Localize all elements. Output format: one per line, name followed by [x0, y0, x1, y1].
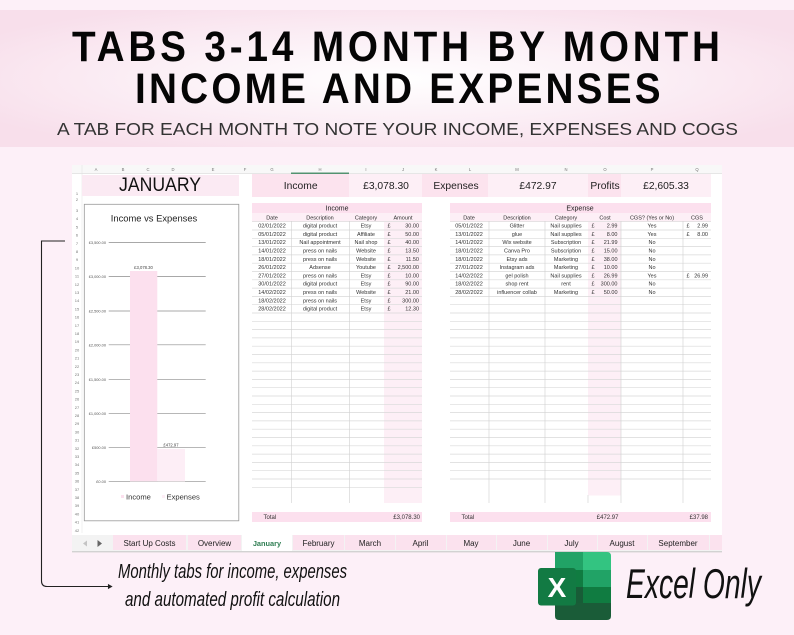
- expense costs: 300.00: [601, 282, 618, 288]
- expense column headers: Date: [463, 215, 475, 221]
- income heading: Income: [326, 206, 349, 213]
- income column headers: Category: [355, 215, 377, 221]
- income amounts: £: [387, 248, 391, 254]
- expense costs: 21.99: [604, 240, 618, 246]
- income total: Total: [264, 515, 276, 521]
- expense costs: £: [591, 265, 595, 271]
- row numbers: 32: [75, 446, 80, 451]
- expense total: [450, 512, 711, 522]
- sheet tabs: Start Up Costs: [123, 539, 176, 548]
- icon: excel logo: X: [548, 572, 567, 603]
- income descriptions: Adsense: [309, 265, 331, 271]
- row numbers: 12: [75, 282, 80, 287]
- expense CGS flags: No: [648, 265, 656, 271]
- sheet tabs: January: [253, 539, 282, 548]
- expense descriptions: gel polish: [505, 273, 529, 279]
- income column headers: Date: [266, 215, 278, 221]
- row numbers: 16: [75, 315, 80, 320]
- month heading: January: JANUARY: [119, 175, 201, 196]
- active tab: January: [242, 535, 292, 551]
- sheet tabs: September: [658, 539, 698, 548]
- expense CGS flags: No: [648, 282, 656, 288]
- expense CGS flags: Yes: [648, 232, 657, 238]
- expense categories: Nail supplies: [550, 224, 582, 230]
- row numbers: 6: [76, 233, 79, 238]
- expense costs: £: [591, 240, 595, 246]
- expense categories: Marketing: [554, 265, 578, 271]
- summary bar: Expenses: [433, 181, 479, 192]
- income descriptions: [299, 224, 341, 313]
- expense categories: rent: [561, 282, 571, 288]
- expense CGS flags: No: [648, 290, 656, 296]
- expense column headers: CGS? (Yes or No): [630, 215, 674, 221]
- row numbers: 41: [75, 520, 80, 525]
- expense categories: Marketing: [554, 290, 578, 296]
- axis labels: £3,500.00: [89, 240, 107, 245]
- expense dates: 14/02/2022: [455, 273, 483, 279]
- sheet tabs: April: [412, 539, 429, 548]
- income amounts: 300.00: [402, 298, 419, 304]
- expense CGS values: £: [686, 273, 690, 279]
- income dates: 14/02/2022: [258, 290, 286, 296]
- expense descriptions: glue: [512, 232, 522, 238]
- income column headers: Amount: [394, 215, 413, 221]
- expense descriptions: Canva Pro: [504, 248, 530, 254]
- spreadsheet panel: [72, 165, 722, 552]
- expense CGS values: £: [686, 224, 690, 230]
- row numbers: 33: [75, 454, 80, 459]
- axis labels: £1,500.00: [89, 377, 107, 382]
- income amounts: £: [387, 298, 391, 304]
- column letters: Q: [695, 167, 699, 172]
- row numbers: 21: [75, 356, 80, 361]
- income descriptions: press on nails: [303, 273, 337, 279]
- income column headers: Description: [306, 215, 334, 221]
- income categories: Website: [356, 290, 376, 296]
- summary bar: £472.97: [519, 181, 557, 192]
- expense categories: Subscription: [551, 240, 581, 246]
- bracket arrow: [42, 241, 112, 588]
- summary bar: £3,078.30: [363, 181, 409, 192]
- income amounts: 21.00: [405, 290, 419, 296]
- expense dates: 27/01/2022: [455, 265, 483, 271]
- expense costs: 10.00: [604, 265, 618, 271]
- row numbers: [75, 191, 80, 533]
- axis labels: [89, 240, 107, 484]
- row numbers: 7: [76, 241, 79, 246]
- income dates: 18/02/2022: [258, 298, 286, 304]
- expense CGS values: 8.00: [697, 232, 708, 238]
- column letters: B: [122, 167, 125, 172]
- income amounts: £: [387, 282, 391, 288]
- column letters: K: [435, 167, 438, 172]
- expense CGS flags: Yes: [648, 273, 657, 279]
- row numbers: 22: [75, 364, 80, 369]
- income categories: Website: [356, 257, 376, 263]
- income descriptions: press on nails: [303, 248, 337, 254]
- income total: [252, 512, 422, 522]
- expense total: Total: [462, 515, 474, 521]
- expense costs: £: [591, 290, 595, 296]
- sheet tabs: August: [610, 539, 635, 548]
- row numbers: 2: [76, 197, 79, 202]
- column letters: G: [270, 167, 274, 172]
- callout: monthly tabs note: [118, 561, 347, 611]
- column letters: M: [515, 167, 519, 172]
- axis labels: £0.00: [96, 479, 107, 484]
- sheet tabs: July: [564, 539, 579, 548]
- expense costs: 2.99: [607, 224, 618, 230]
- income amounts: [387, 224, 419, 313]
- income total: £3,078.30: [393, 515, 421, 521]
- row numbers: 8: [76, 249, 79, 254]
- expense dates: 18/02/2022: [455, 282, 483, 288]
- expense column headers: Cost: [599, 215, 611, 221]
- tab navigation arrows: [83, 540, 102, 547]
- income amounts: 30.00: [405, 224, 419, 230]
- expense costs: 38.00: [604, 257, 618, 263]
- income dates: 18/01/2022: [258, 257, 286, 263]
- income amounts: 90.00: [405, 282, 419, 288]
- income descriptions: digital product: [303, 307, 338, 313]
- row numbers: 20: [75, 347, 80, 352]
- column letters: A: [95, 167, 98, 172]
- row numbers: 23: [75, 372, 80, 377]
- legend: [121, 492, 200, 502]
- income amounts: £: [387, 265, 391, 271]
- chart: income vs expenses: [84, 204, 239, 521]
- row numbers: 39: [75, 503, 80, 508]
- column letters: O: [603, 167, 607, 172]
- row numbers: 5: [76, 224, 79, 229]
- sheet tabs: Overview: [198, 539, 231, 548]
- row numbers: 25: [75, 388, 80, 393]
- expense CGS values: 2.99: [697, 224, 708, 230]
- expense descriptions: Instagram ads: [500, 265, 535, 271]
- income descriptions: press on nails: [303, 298, 337, 304]
- row numbers: 3: [76, 208, 79, 213]
- expense costs: £: [591, 257, 595, 263]
- sheet tabs: June: [513, 539, 531, 548]
- row numbers: 35: [75, 470, 80, 475]
- expense descriptions: Glitter: [510, 224, 525, 230]
- expense CGS flags: No: [648, 248, 656, 254]
- row numbers: 15: [75, 306, 80, 311]
- expense column headers: Category: [555, 215, 577, 221]
- income amounts: 40.00: [405, 240, 419, 246]
- expense table: [450, 203, 711, 522]
- expense CGS flags: [648, 224, 657, 296]
- expense categories: [550, 224, 582, 296]
- axis labels: £2,500.00: [89, 308, 107, 314]
- sheet tabs: May: [463, 539, 479, 548]
- expense costs: £: [591, 224, 595, 230]
- sheet tabs: March: [359, 539, 381, 548]
- callout: monthly tabs note: and automated profit calculation: [125, 589, 340, 611]
- expense descriptions: Etsy ads: [506, 257, 528, 263]
- column letters: N: [564, 167, 568, 172]
- income categories: Etsy: [361, 224, 372, 230]
- sheet tabs: [72, 535, 722, 552]
- income categories: Etsy: [361, 273, 372, 279]
- income amounts: 11.50: [406, 257, 419, 263]
- income descriptions: press on nails: [303, 257, 337, 263]
- row numbers: 36: [75, 479, 80, 484]
- summary bar: £2,605.33: [643, 181, 689, 192]
- income dates: 27/01/2022: [258, 273, 286, 279]
- income dates: 05/01/2022: [258, 232, 286, 238]
- expense total: £37.98: [690, 515, 709, 521]
- income amounts: £: [387, 307, 391, 313]
- bar: expenses: [157, 449, 185, 481]
- row numbers: 26: [75, 397, 80, 402]
- income descriptions: digital product: [303, 232, 338, 238]
- income dates: 30/01/2022: [258, 282, 286, 288]
- expense costs: 26.99: [604, 273, 618, 279]
- income descriptions: Nail appointment: [299, 240, 341, 246]
- summary bar: Profits: [590, 181, 620, 192]
- column letters: [95, 167, 699, 172]
- legend: Income: [126, 492, 151, 502]
- column letters: F: [244, 167, 247, 172]
- expense column headers: Description: [503, 215, 531, 221]
- income amounts: 10.00: [405, 273, 419, 279]
- expense costs: [591, 224, 618, 296]
- callout: monthly tabs note: Monthly tabs for income, expenses: [118, 561, 347, 583]
- axis labels: £3,000.00: [89, 274, 107, 279]
- row numbers: 9: [76, 257, 79, 262]
- expense heading: Expense: [566, 206, 594, 213]
- row numbers: 1: [76, 191, 79, 196]
- income dates: 13/01/2022: [258, 240, 286, 246]
- income categories: Affiliate: [357, 232, 375, 238]
- expense costs: 15.00: [604, 248, 618, 254]
- expense categories: Nail supplies: [550, 273, 582, 279]
- expense costs: £: [591, 282, 595, 288]
- row numbers: 31: [75, 438, 80, 443]
- row numbers: 24: [75, 380, 80, 385]
- income dates: [258, 224, 286, 313]
- row numbers: 18: [75, 331, 80, 336]
- expense categories: Subscription: [551, 248, 581, 254]
- income amounts: £: [387, 290, 391, 296]
- bar labels: [134, 265, 179, 448]
- expense costs: £: [591, 273, 595, 279]
- expense dates: 18/01/2022: [455, 248, 483, 254]
- income column headers: [266, 215, 413, 221]
- expense CGS values: £: [686, 232, 690, 238]
- income dates: 02/01/2022: [258, 224, 286, 230]
- expense categories: Marketing: [554, 257, 578, 263]
- expense dates: 14/01/2022: [455, 240, 483, 246]
- expense descriptions: shop rent: [506, 282, 529, 288]
- row numbers: 42: [75, 528, 80, 533]
- column letters: D: [171, 167, 175, 172]
- row numbers: 10: [75, 265, 80, 270]
- income dates: 28/02/2022: [258, 307, 286, 313]
- income descriptions: digital product: [303, 282, 338, 288]
- chart title: Income vs Expenses: [111, 212, 198, 224]
- expense dates: 18/01/2022: [455, 257, 483, 263]
- income amounts: £: [387, 240, 391, 246]
- income amounts: £: [387, 232, 391, 238]
- income categories: [355, 224, 377, 313]
- column letters: I: [365, 167, 367, 172]
- expense categories: Nail supplies: [550, 232, 582, 238]
- summary bar: [252, 174, 711, 197]
- income dates: 26/01/2022: [258, 265, 286, 271]
- expense CGS flags: No: [648, 257, 656, 263]
- expense CGS flags: Yes: [648, 224, 657, 230]
- title: [72, 22, 720, 112]
- income amounts: 50.00: [405, 232, 419, 238]
- expense costs: 8.00: [607, 232, 618, 238]
- income amounts: 13.50: [405, 248, 419, 254]
- axis labels: £2,000.00: [89, 342, 107, 347]
- income categories: Youtube: [356, 265, 376, 271]
- expense costs: 50.00: [604, 290, 618, 296]
- bar labels: £3,078.30: [134, 265, 153, 270]
- row numbers: 38: [75, 495, 80, 500]
- income descriptions: press on nails: [303, 290, 337, 296]
- income amounts: £: [387, 273, 391, 279]
- row numbers: 37: [75, 487, 80, 492]
- expense dates: 05/01/2022: [455, 224, 483, 230]
- axis labels: £1,000.00: [89, 411, 107, 416]
- income dates: 14/01/2022: [258, 248, 286, 254]
- row numbers: 27: [75, 405, 80, 410]
- row numbers: 13: [75, 290, 80, 295]
- income amounts: £: [387, 257, 391, 263]
- row numbers: 4: [76, 216, 79, 221]
- income categories: Nail shop: [355, 240, 377, 246]
- expense costs: £: [591, 248, 595, 254]
- expense dates: 28/02/2022: [455, 290, 483, 296]
- title: TABS 3-14 MONTH BY MONTH: [72, 22, 720, 70]
- column letters: P: [651, 167, 654, 172]
- expense CGS values: 26.99: [694, 273, 708, 279]
- expense column headers: [463, 215, 703, 221]
- row numbers: 28: [75, 413, 80, 418]
- row numbers: 11: [75, 274, 80, 279]
- income descriptions: digital product: [303, 224, 338, 230]
- subtitle: A TAB FOR EACH MONTH TO NOTE YOUR INCOME, EXPENSES AND COGS: [57, 119, 738, 139]
- column letters: H: [318, 167, 322, 172]
- column letters: L: [469, 167, 472, 172]
- row numbers: 14: [75, 298, 80, 303]
- income categories: Etsy: [361, 307, 372, 313]
- sheet tabs: February: [302, 539, 335, 548]
- expense costs: £: [591, 232, 595, 238]
- column letters: C: [146, 167, 150, 172]
- income amounts: 2,500.00: [398, 265, 419, 271]
- expense dates: 13/01/2022: [455, 232, 483, 238]
- income amounts: 12.30: [405, 307, 419, 313]
- row numbers: 40: [75, 511, 80, 516]
- row numbers: 30: [75, 429, 80, 434]
- income table: [252, 203, 422, 522]
- legend: Expenses: [166, 492, 200, 502]
- expense total: £472.97: [597, 515, 619, 521]
- expense dates: [455, 224, 483, 296]
- row numbers: 19: [75, 339, 80, 344]
- expense descriptions: Wix website: [502, 240, 532, 246]
- income categories: Etsy: [361, 282, 372, 288]
- expense descriptions: [497, 224, 537, 296]
- summary bar: Income: [284, 181, 318, 192]
- row numbers: 29: [75, 421, 80, 426]
- bar: income: [130, 271, 157, 481]
- title banner: [0, 10, 794, 147]
- income categories: Website: [356, 248, 376, 254]
- expense descriptions: influencer collab: [497, 290, 537, 296]
- expense CGS values: [686, 224, 708, 279]
- axis labels: £500.00: [92, 445, 107, 450]
- income categories: Etsy: [361, 298, 372, 304]
- expense CGS flags: No: [648, 240, 656, 246]
- row numbers: 17: [75, 323, 80, 328]
- expense column headers: CGS: [691, 215, 703, 221]
- column letters: J: [402, 167, 404, 172]
- title: INCOME AND EXPENSES: [135, 64, 661, 112]
- icon: excel logo: [538, 552, 611, 620]
- column letters: E: [212, 167, 215, 172]
- income amounts: £: [387, 224, 391, 230]
- row numbers: 34: [75, 462, 80, 467]
- month heading: January: [82, 175, 239, 196]
- bar labels: £472.97: [163, 442, 179, 448]
